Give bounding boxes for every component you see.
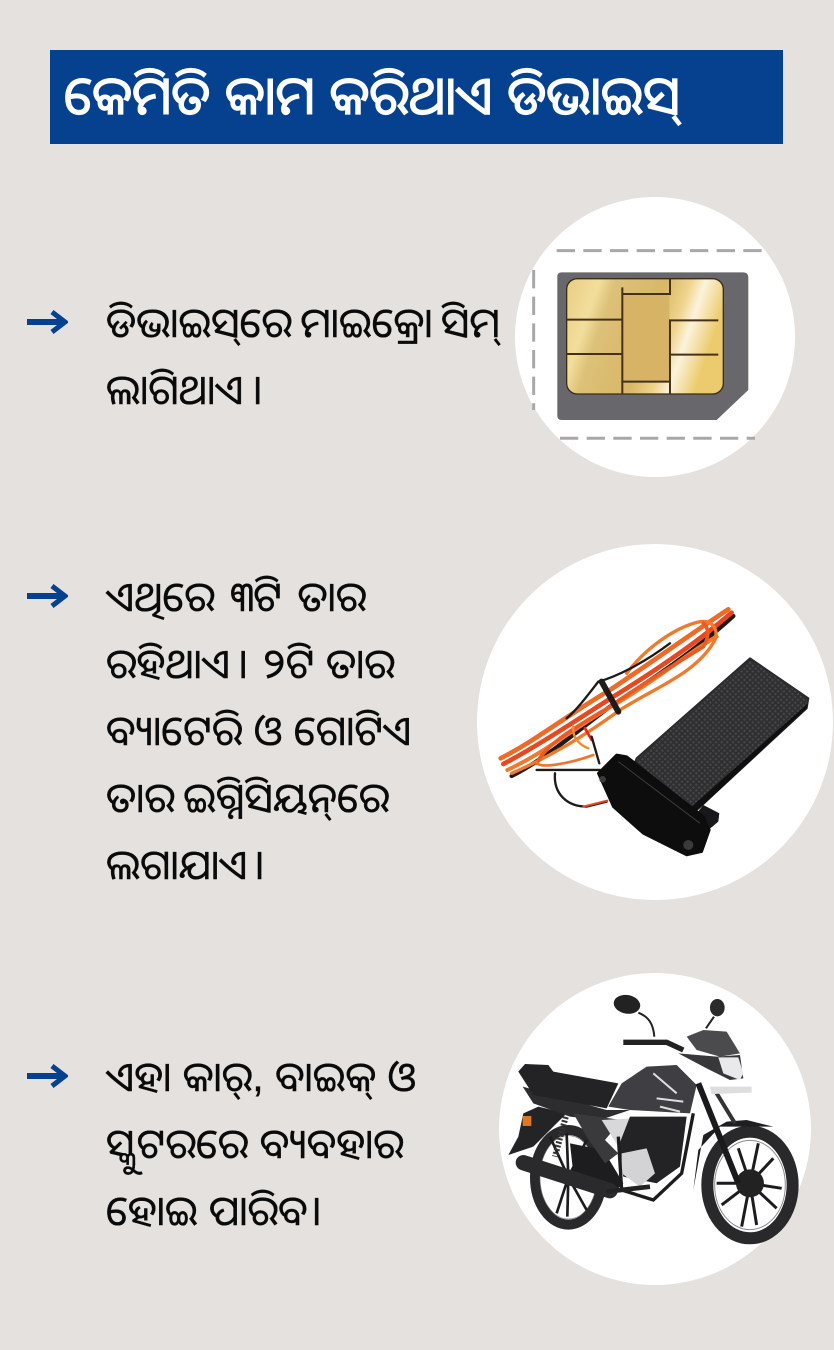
text: item two: ଲଗାଯାଏ xyxy=(106,842,247,888)
text: item two: ଏଥିରେ ୩ଟି ତାର xyxy=(106,574,366,620)
swingarm xyxy=(570,1143,623,1193)
text: item one: । xyxy=(253,367,263,413)
text: item three: ଏହା କାର୍, ବାଇକ୍ ଓ xyxy=(106,1054,416,1100)
text: item one xyxy=(106,300,501,413)
text: item two: । xyxy=(238,641,248,687)
side panel and frame xyxy=(523,1087,630,1120)
front wheel xyxy=(707,1132,793,1238)
arrow: item one xyxy=(27,310,68,334)
exhaust xyxy=(523,1163,610,1191)
text: item one: ଡିଭାଇସ୍‌ରେ ମାଇକ୍ରୋ ସିମ୍ xyxy=(106,300,500,346)
headlight and cowl xyxy=(687,1030,740,1057)
text: item three xyxy=(106,1054,416,1234)
text: item two: ତାର ଇଗ୍ନିସିୟନ୍‌ରେ xyxy=(106,775,389,821)
shock absorber xyxy=(555,1113,567,1157)
text: item three: । xyxy=(312,1188,322,1234)
fuel tank xyxy=(608,1065,697,1113)
text: item two: ବ୍ୟାଟେରି ଓ ଗୋଟିଏ xyxy=(106,708,411,754)
title banner: କେମିତି କାମ କରିଥାଏ ଡିଭାଇସ୍ xyxy=(64,67,680,126)
handlebars and mirrors xyxy=(623,1042,683,1050)
text: item two: । xyxy=(254,842,265,888)
front fender and fork xyxy=(693,1120,773,1190)
title banner xyxy=(50,50,783,144)
arrow: item three xyxy=(27,1064,68,1088)
rear wheel xyxy=(535,1130,602,1225)
text: item three: ସ୍କୁଟରରେ ବ୍ୟବହାର xyxy=(106,1121,404,1167)
text: item one: ଲାଗିଥାଏ xyxy=(106,367,244,413)
arrow: item two xyxy=(27,584,68,608)
engine xyxy=(618,1117,687,1183)
text: item two: ରହିଥାଏ ୨ଟି ତାର xyxy=(106,641,395,687)
rear fender xyxy=(508,1107,567,1155)
seat xyxy=(518,1064,618,1108)
text: item two xyxy=(106,574,411,888)
text: item three: ହୋଇ ପାରିବ xyxy=(106,1188,308,1234)
